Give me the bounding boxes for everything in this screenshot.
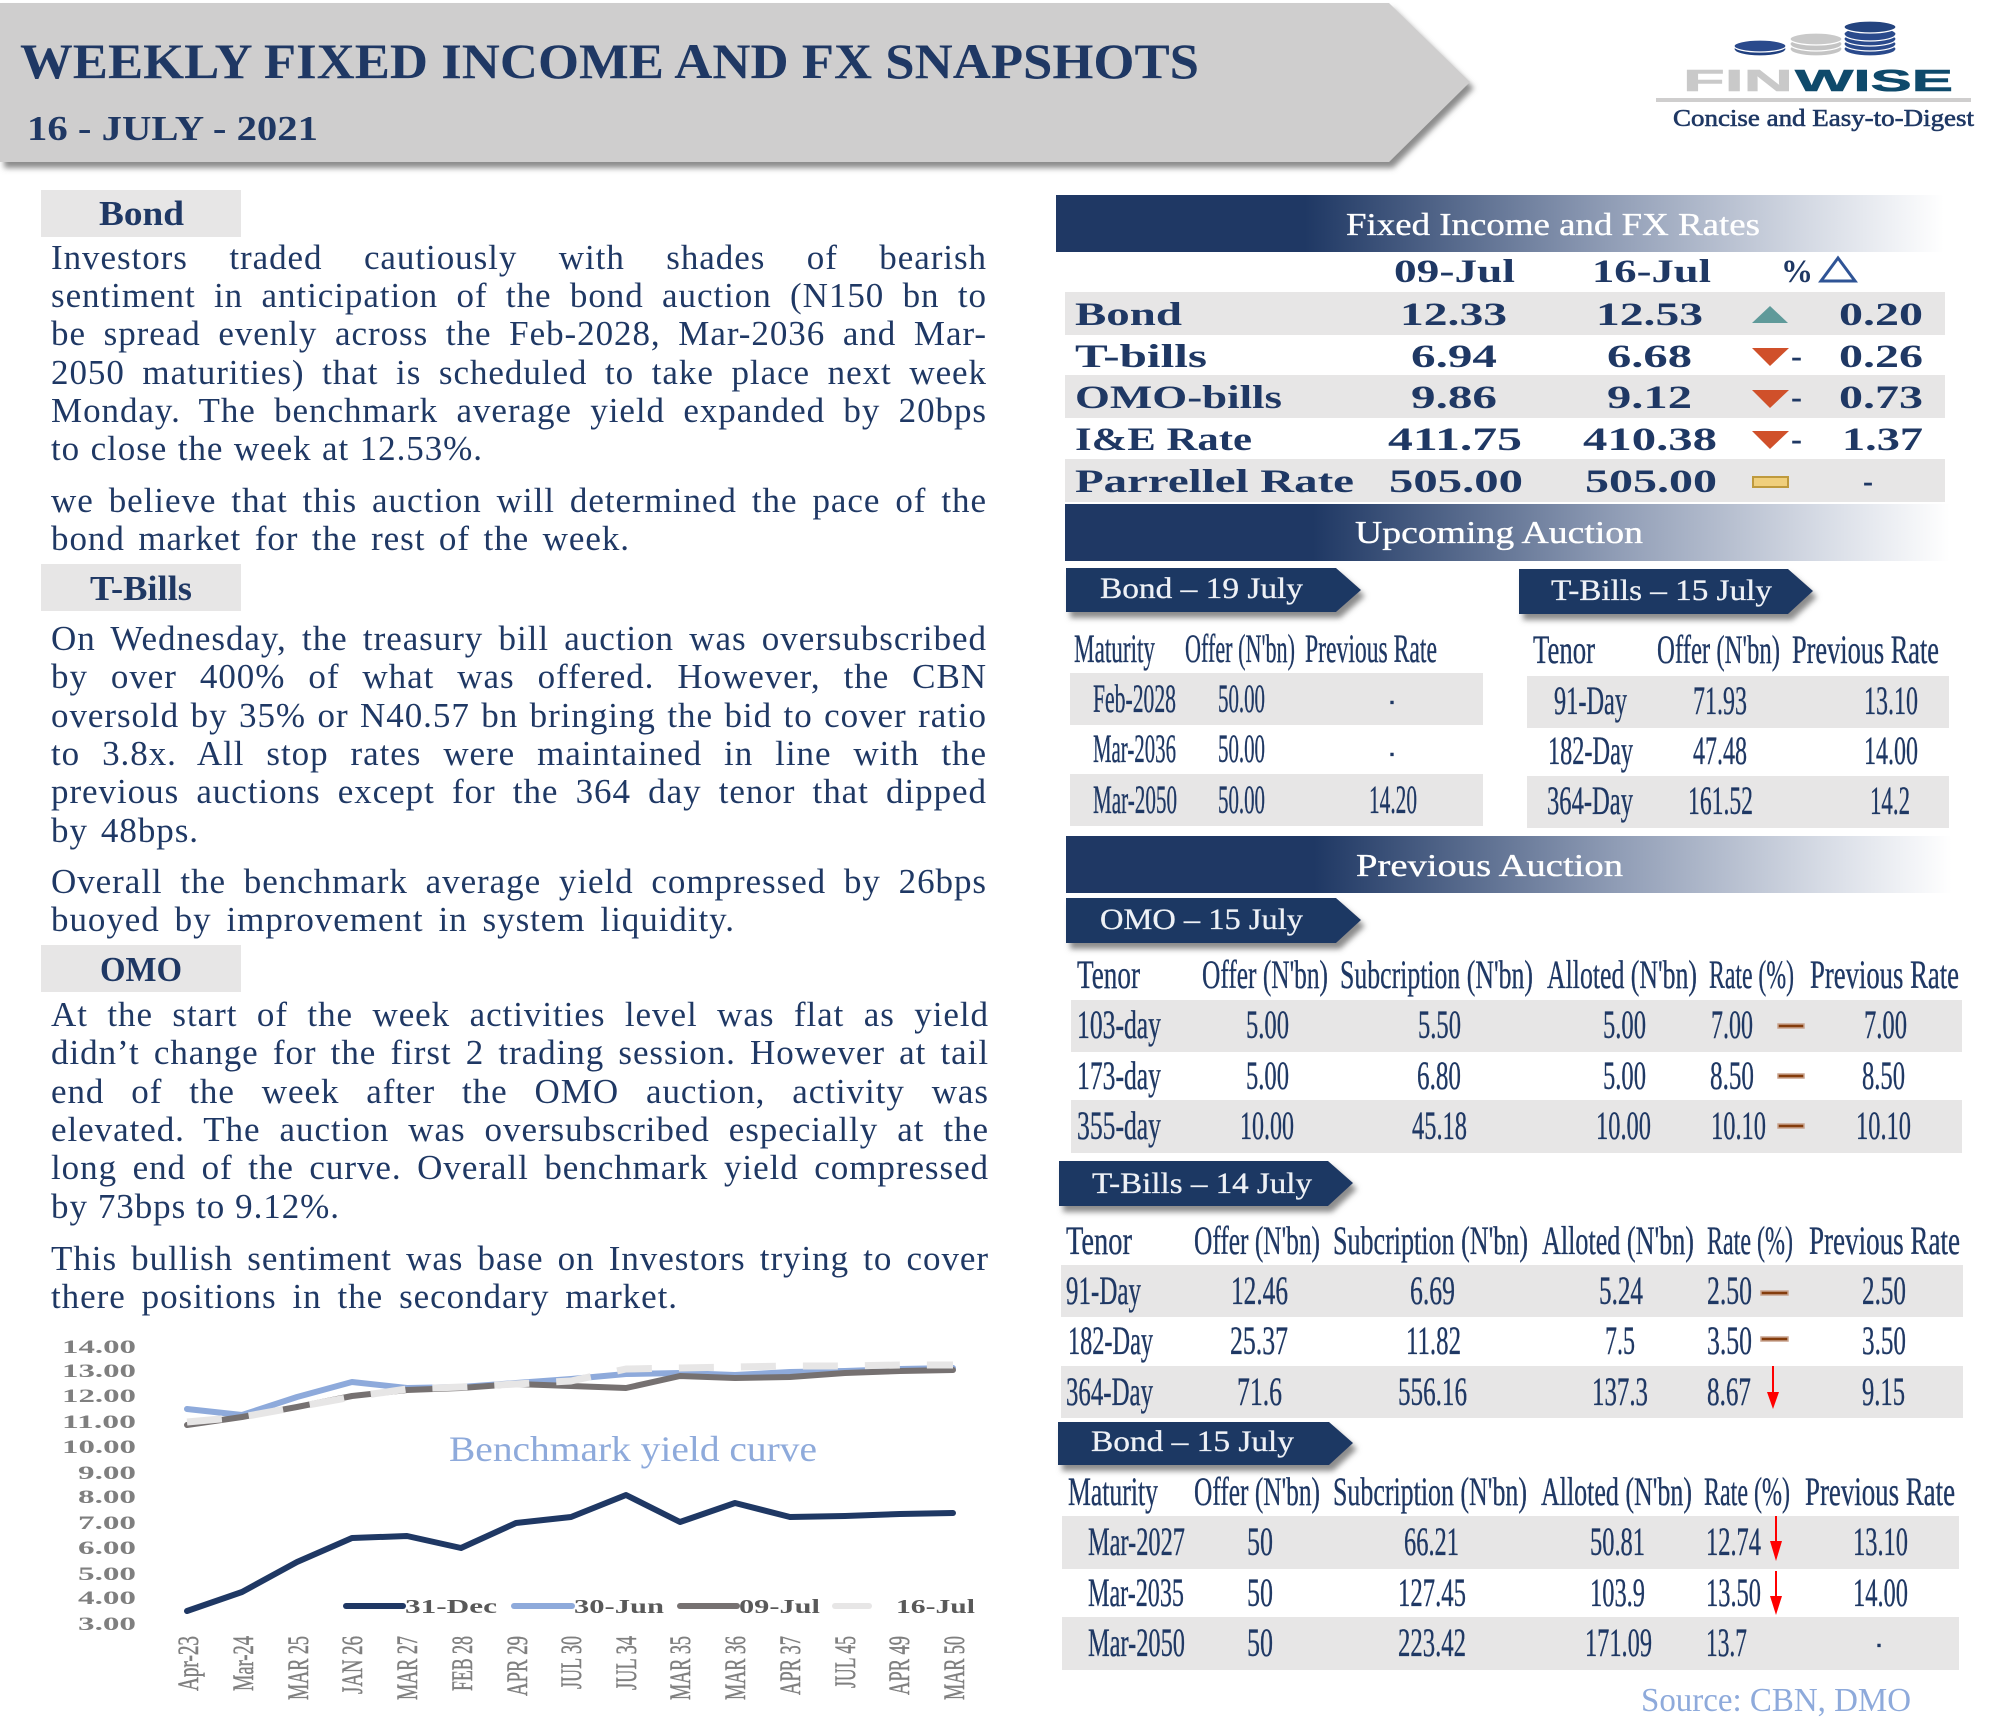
table: T-bills auction: 364-Day (1066, 1369, 1153, 1414)
date: 16 - JULY - 2021 (27, 109, 318, 148)
table: OMO auction: 5.00 (1246, 1002, 1289, 1047)
table: bond auction: 171.09 (1585, 1620, 1652, 1665)
text block: T-bills commentary (51, 620, 987, 939)
table: upcoming bond auction: 14.20 (1369, 777, 1417, 822)
table: T-bills auction: Tenor (1066, 1218, 1132, 1263)
text: there positions in the secondary market. (51, 1278, 678, 1316)
row: T-bills: T-bills (1075, 339, 1207, 375)
text: elevated. The auction was oversubscribed especially at the (51, 1111, 989, 1149)
table: upcoming T-bills auction: 13.10 (1864, 678, 1918, 723)
table: T-bills auction: 7.5 (1605, 1318, 1635, 1363)
table: upcoming bond auction: - (1390, 728, 1394, 773)
row: T-bills: 6.94 (1411, 339, 1497, 375)
table: upcoming T-bills auction: 91-Day (1554, 678, 1627, 723)
table: OMO auction: 5.00 (1603, 1053, 1646, 1098)
row: T-bills (1075, 339, 1923, 375)
table: OMO auction: 5.00 (1246, 1053, 1289, 1098)
line series (187, 1365, 953, 1611)
heading: OMO: OMO (100, 950, 182, 989)
table: upcoming T-bills auction: 14.00 (1864, 728, 1918, 773)
text: long end of the curve. Overall benchmark yield compressed (51, 1149, 989, 1187)
table: bond auction: 12.74 (1706, 1519, 1761, 1564)
table: OMO auction: 10.10 (1711, 1103, 1766, 1148)
table: upcoming bond auction: - (1390, 676, 1394, 721)
table header (1394, 254, 1855, 290)
table: bond auction: Maturity (1068, 1469, 1158, 1514)
arrow: rate down (1767, 1366, 1779, 1409)
table: T-bills auction: 91-Day (1066, 1268, 1141, 1313)
tag: OMO 15 July: OMO – 15 July (1100, 903, 1303, 936)
table: T-bills auction: 2.50 (1707, 1268, 1752, 1313)
table: T-bills auction: 556.16 (1398, 1369, 1467, 1414)
row: Parrellel Rate: - (1863, 464, 1873, 500)
x axis labels: Apr-23 (172, 1636, 205, 1691)
row: T-bills: 0.26 (1839, 339, 1923, 375)
text: we believe that this auction will determined the pace of the (51, 482, 987, 520)
row: OMO-bills: 9.86 (1411, 380, 1497, 416)
table: OMO auction: 103-day (1077, 1002, 1161, 1047)
table: T-bills auction: 71.6 (1237, 1369, 1282, 1414)
table: bond auction: 50.81 (1590, 1519, 1645, 1564)
section bar: Upcoming Auction (1355, 514, 1643, 550)
table: upcoming bond auction: Mar-2050 (1093, 777, 1177, 822)
x axis labels: JUL 34 (610, 1636, 643, 1690)
table: OMO auction: 6.80 (1417, 1053, 1461, 1098)
tag: OMO 15 July (1066, 898, 1361, 943)
text: oversold by 35% or N40.57 bn bringing the bid to cover ratio (51, 697, 987, 735)
table: upcoming T-bills auction (1527, 627, 1949, 828)
row: OMO-bills: OMO-bills (1075, 380, 1282, 416)
row: I&E Rate: - (1791, 422, 1802, 458)
y axis labels: 4.00 (78, 1588, 136, 1609)
x axis labels: MAR 27 (391, 1636, 424, 1700)
table: T-bills auction: 6.69 (1410, 1268, 1455, 1313)
y axis labels: 12.00 (62, 1386, 136, 1407)
y axis labels: 13.00 (62, 1361, 136, 1382)
y axis labels: 8.00 (78, 1487, 136, 1508)
title banner (0, 3, 1470, 162)
x axis labels: APR 37 (774, 1636, 807, 1695)
table: bond auction: 66.21 (1404, 1519, 1459, 1564)
legend: 31-Dec (405, 1596, 497, 1618)
title: WEEKLY FIXED INCOME AND FX SNAPSHOTS (20, 33, 1199, 89)
x axis labels: APR 29 (501, 1636, 534, 1696)
table: OMO auction (1071, 952, 1962, 1153)
text: 2050 maturities) that is scheduled to take place next week (51, 354, 987, 392)
text: by 73bps to 9.12%. (51, 1188, 340, 1226)
table: bond auction: 223.42 (1398, 1620, 1466, 1665)
tagline: Concise and Easy-to-Digest (1673, 106, 1974, 132)
tag: T-Bills 15 July: T-Bills – 15 July (1551, 574, 1772, 607)
text: On Wednesday, the treasury bill auction was oversubscribed (51, 620, 987, 658)
tag: T-Bills 15 July (1519, 569, 1813, 614)
tag: T-Bills 14 July: T-Bills – 14 July (1092, 1167, 1312, 1200)
arrow: rate down (1770, 1516, 1782, 1561)
row: I&E Rate (1075, 422, 1923, 458)
table: OMO auction: 45.18 (1412, 1103, 1467, 1148)
table: upcoming T-bills auction: 47.48 (1693, 728, 1747, 773)
source note: Source: CBN, DMO (1641, 1682, 1911, 1719)
x axis labels: MAR 36 (719, 1636, 752, 1700)
y axis labels: 11.00 (62, 1412, 136, 1433)
legend: 09-Jul (739, 1596, 821, 1618)
row: Bond: 12.33 (1400, 297, 1507, 333)
arrow: rate down (1770, 1571, 1782, 1615)
table: T-bills auction (1061, 1218, 1963, 1418)
row: Parrellel Rate: 505.00 (1389, 464, 1523, 500)
wordmark: FIN (1683, 63, 1793, 98)
text: by 48bps. (51, 812, 199, 850)
x axis labels: MAR 35 (664, 1636, 697, 1700)
table: OMO auction: 10.00 (1596, 1103, 1651, 1148)
table header: 16-Jul (1592, 254, 1711, 290)
text block: bond commentary (51, 239, 987, 558)
table: bond auction: Subcription (N'bn) (1333, 1469, 1527, 1514)
table: upcoming bond auction: Previous Rate (1305, 626, 1437, 671)
table: OMO auction: 5.50 (1418, 1002, 1461, 1047)
y axis labels: 6.00 (78, 1538, 136, 1559)
table: bond auction: 14.00 (1853, 1570, 1908, 1615)
x axis labels: JUL 30 (555, 1636, 588, 1689)
table: upcoming bond auction: Offer (N'bn) (1185, 626, 1295, 671)
panel: fixed income and FX rates (1056, 195, 1945, 502)
table: bond auction: 127.45 (1398, 1570, 1466, 1615)
wordmark (1683, 63, 1953, 98)
x axis labels: MAR 25 (282, 1636, 315, 1700)
row: Bond: Bond (1075, 297, 1182, 333)
text: bond market for the rest of the week. (51, 520, 630, 558)
text: previous auctions except for the 364 day tenor that dipped (51, 773, 987, 811)
table header: % (1781, 254, 1813, 290)
table: upcoming T-bills auction: 14.2 (1870, 778, 1910, 823)
y axis labels: 10.00 (62, 1437, 136, 1458)
chart title: Benchmark yield curve (449, 1429, 817, 1469)
y axis labels: 14.00 (62, 1337, 136, 1358)
heading: T-Bills (41, 564, 241, 611)
table: bond auction: 50 (1247, 1570, 1273, 1615)
tag: T-Bills 14 July (1059, 1161, 1353, 1206)
table: T-bills auction: 12.46 (1231, 1268, 1288, 1313)
row: Parrellel Rate: 505.00 (1585, 464, 1717, 500)
table: bond auction: Alloted (N'bn) (1541, 1469, 1692, 1514)
table: OMO auction: Offer (N'bn) (1202, 952, 1328, 997)
panel: upcoming auction (1065, 504, 1950, 828)
table: upcoming T-bills auction: Tenor (1533, 627, 1595, 672)
table: T-bills auction: Alloted (N'bn) (1542, 1218, 1694, 1263)
text: didn’t change for the first 2 trading session. However at tail (51, 1034, 989, 1072)
tag: Bond 19 July: Bond – 19 July (1100, 572, 1303, 605)
text: At the start of the week activities level was flat as yield (51, 996, 989, 1034)
row: I&E Rate: 411.75 (1388, 422, 1522, 458)
section bar: Previous Auction (1356, 847, 1623, 883)
y axis labels: 3.00 (78, 1614, 136, 1635)
y axis labels: 7.00 (78, 1513, 136, 1534)
y axis labels: 9.00 (78, 1463, 136, 1484)
text: be spread evenly across the Feb-2028, Mar-2036 and Mar- (51, 315, 987, 353)
x axis labels: Mar-24 (227, 1636, 260, 1691)
table: upcoming bond auction (1070, 626, 1483, 826)
table: OMO auction: 7.00 (1864, 1002, 1907, 1047)
row: OMO-bills (1065, 375, 1945, 418)
table: upcoming bond auction: Feb-2028 (1093, 676, 1176, 721)
text: buoyed by improvement in system liquidity. (51, 901, 735, 939)
table: OMO auction: 173-day (1077, 1053, 1161, 1098)
table: upcoming T-bills auction: 161.52 (1688, 778, 1753, 823)
legend: 30-Jun (574, 1596, 664, 1618)
table: upcoming bond auction: Maturity (1074, 626, 1155, 671)
table: bond auction: 13.10 (1853, 1519, 1908, 1564)
table: upcoming T-bills auction: Offer (N'bn) (1657, 627, 1780, 672)
table: T-bills auction: 9.15 (1862, 1369, 1905, 1414)
table: T-bills auction: 137.3 (1592, 1369, 1648, 1414)
table: bond auction: Mar-2027 (1088, 1519, 1185, 1564)
table: T-bills auction: Rate (%) (1707, 1218, 1793, 1263)
table: OMO auction: 8.50 (1710, 1053, 1754, 1098)
table: bond auction: Mar-2050 (1088, 1620, 1185, 1665)
y axis labels (62, 1337, 136, 1635)
row: I&E Rate: 1.37 (1842, 422, 1923, 458)
table: bond auction: Rate (%) (1704, 1469, 1790, 1514)
x axis labels: JUL 45 (829, 1636, 862, 1688)
section bar: Fixed Income and FX Rates (1346, 206, 1760, 242)
table: upcoming T-bills auction: 182-Day (1548, 728, 1633, 773)
text: end of the week after the OMO auction, activity was (51, 1073, 989, 1111)
table: T-bills auction: 2.50 (1862, 1268, 1906, 1313)
x axis labels: MAR 50 (938, 1636, 971, 1700)
table: OMO auction: Tenor (1077, 952, 1140, 997)
row: Parrellel Rate (1065, 459, 1945, 502)
text block: OMO commentary (51, 996, 989, 1316)
tag: Bond 15 July: Bond – 15 July (1091, 1425, 1294, 1458)
table: T-bills auction: 8.67 (1707, 1369, 1751, 1414)
heading: Bond (41, 190, 241, 237)
logo: Finwise (1656, 21, 1974, 132)
row: Parrellel Rate: Parrellel Rate (1075, 464, 1354, 500)
table: upcoming bond auction: 50.00 (1218, 676, 1265, 721)
tag: Bond 19 July (1066, 568, 1361, 612)
tag: Bond 15 July (1058, 1422, 1353, 1465)
y axis labels: 5.00 (78, 1564, 136, 1585)
table: bond auction: Offer (N'bn) (1194, 1469, 1320, 1514)
table: T-bills auction: 3.50 (1707, 1318, 1752, 1363)
table: T-bills auction: 25.37 (1230, 1318, 1288, 1363)
table: bond auction: - (1877, 1619, 1881, 1664)
table: bond auction: 13.7 (1706, 1620, 1747, 1665)
text: Monday. The benchmark average yield expanded by 20bps (51, 392, 987, 430)
x axis labels: APR 49 (883, 1636, 916, 1695)
text: Investors traded cautiously with shades of bearish (51, 239, 987, 277)
x axis labels: JAN 26 (336, 1636, 369, 1694)
panel: previous auction (1058, 836, 1963, 1670)
table: T-bills auction: Subcription (N'bn) (1333, 1218, 1528, 1263)
chart: benchmark yield curve (62, 1337, 976, 1700)
legend: 16-Jul (896, 1596, 976, 1618)
table: upcoming T-bills auction: 71.93 (1693, 678, 1747, 723)
table: OMO auction: Subcription (N'bn) (1340, 952, 1533, 997)
table: T-bills auction: 11.82 (1406, 1318, 1461, 1363)
text: sentiment in anticipation of the bond auction (N150 bn to (51, 277, 987, 315)
table: bond auction: 50 (1247, 1620, 1273, 1665)
text: to 3.8x. All stop rates were maintained in line with the (51, 735, 987, 773)
table: bond auction: 50 (1247, 1519, 1273, 1564)
table: T-bills auction: 3.50 (1862, 1318, 1906, 1363)
wordmark: WISE (1795, 63, 1953, 98)
legend (346, 1596, 976, 1618)
section bar (1066, 836, 1952, 893)
row: OMO-bills: 0.73 (1839, 380, 1923, 416)
table: OMO auction: 8.50 (1862, 1053, 1905, 1098)
table: bond auction: 13.50 (1706, 1570, 1761, 1615)
heading: Bond: Bond (99, 194, 185, 233)
row: Bond: 12.53 (1596, 297, 1703, 333)
text: Overall the benchmark average yield compressed by 26bps (51, 863, 987, 901)
table: OMO auction: Rate (%) (1709, 952, 1794, 997)
table: OMO auction: 355-day (1077, 1103, 1161, 1148)
table header: 09-Jul (1394, 254, 1515, 290)
icon: coin stacks (1734, 21, 1896, 56)
table: upcoming bond auction: Mar-2036 (1093, 726, 1176, 771)
table: upcoming bond auction: 50.00 (1218, 726, 1265, 771)
x axis labels (172, 1636, 971, 1700)
heading: OMO (41, 945, 241, 992)
text: to close the week at 12.53%. (51, 430, 483, 468)
text: This bullish sentiment was base on Investors trying to cover (51, 1240, 989, 1278)
row: OMO-bills: 9.12 (1607, 380, 1692, 416)
table: upcoming T-bills auction: 364-Day (1547, 778, 1633, 823)
section bar (1056, 195, 1944, 252)
table: bond auction (1062, 1469, 1959, 1670)
table: bond auction: 103.9 (1590, 1570, 1645, 1615)
row: I&E Rate: 410.38 (1583, 422, 1717, 458)
table: T-bills auction: 5.24 (1599, 1268, 1643, 1313)
row: T-bills: - (1791, 339, 1802, 375)
text: by over 400% of what was offered. However, the CBN (51, 658, 987, 696)
table: upcoming bond auction: 50.00 (1218, 777, 1265, 822)
table: OMO auction: 10.10 (1856, 1103, 1911, 1148)
x axis labels: FEB 28 (446, 1636, 479, 1691)
table: OMO auction: 7.00 (1711, 1002, 1753, 1047)
table: OMO auction: 5.00 (1603, 1002, 1646, 1047)
row: OMO-bills: - (1791, 380, 1802, 416)
row: Bond (1065, 292, 1945, 335)
table: bond auction: Mar-2035 (1088, 1570, 1184, 1615)
section bar (1065, 504, 1950, 561)
table: OMO auction: Alloted (N'bn) (1547, 952, 1697, 997)
row: Bond: 0.20 (1839, 297, 1923, 333)
table: T-bills auction: Offer (N'bn) (1194, 1218, 1320, 1263)
row: I&E Rate: I&E Rate (1075, 422, 1252, 458)
table: OMO auction: 10.00 (1240, 1103, 1294, 1148)
heading: T-Bills: T-Bills (90, 569, 192, 608)
row: T-bills: 6.68 (1607, 339, 1692, 375)
table: T-bills auction: 182-Day (1068, 1318, 1153, 1363)
